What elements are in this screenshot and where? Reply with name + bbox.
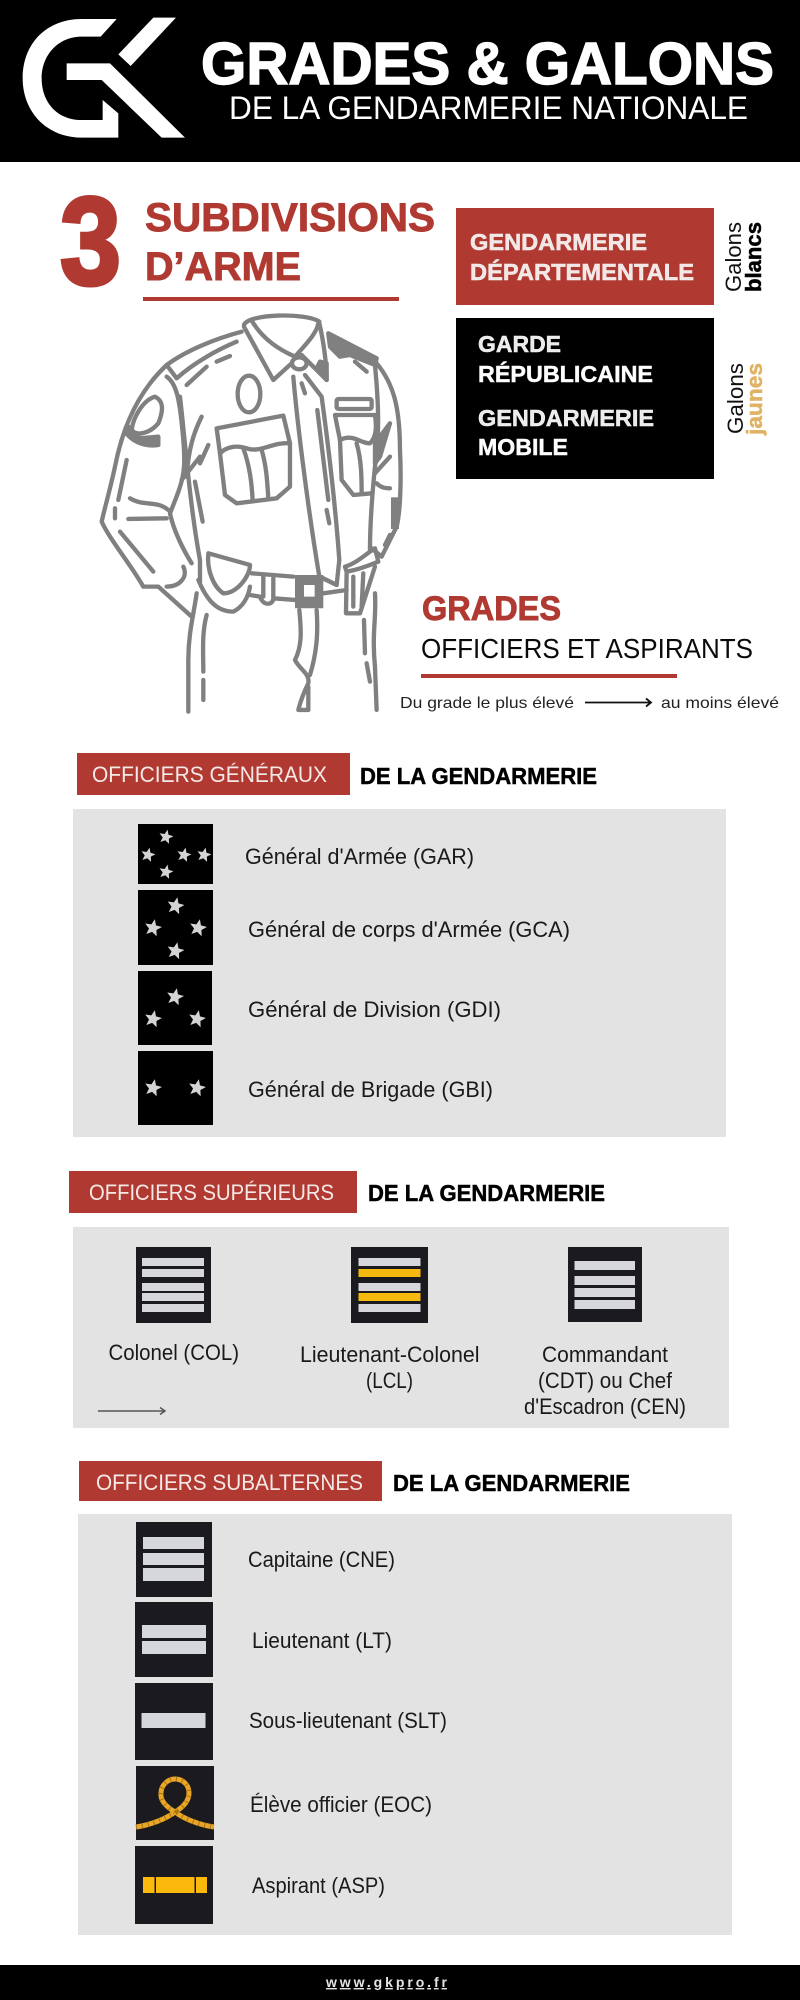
icon: GK logo — [23, 18, 185, 138]
note: sens de lecture des grades: Du grade le plus élevé — [400, 695, 574, 712]
arrow: sens de lecture — [98, 1408, 165, 1414]
note: sens de lecture des grades — [400, 695, 779, 712]
section heading: officiers supérieurs — [69, 1171, 605, 1213]
panel: garde républicaine et gendarmerie mobile: GARDE — [478, 331, 561, 357]
badge: aspirant — [135, 1846, 213, 1924]
heading: 3 subdivisions d'arme — [60, 173, 435, 311]
panel: gendarmerie départementale: GENDARMERIE — [470, 229, 647, 255]
panel: garde républicaine et gendarmerie mobile: MOBILE — [478, 434, 568, 460]
heading: 3 subdivisions d'arme: 3 — [60, 173, 121, 311]
label: général de brigade: Général de Brigade (GBI) — [248, 1077, 493, 1102]
label: commandant ou chef d'escadron — [524, 1342, 686, 1419]
subtitle: DE LA GENDARMERIE NATIONALE — [229, 90, 748, 126]
label: commandant ou chef d'escadron: (CDT) ou Chef — [538, 1368, 673, 1393]
section heading: officiers généraux: DE LA GENDARMERIE — [360, 763, 597, 789]
header banner — [0, 0, 800, 162]
heading: grades officiers et aspirants: OFFICIERS ET ASPIRANTS — [421, 633, 753, 664]
badge: général de division, trois étoiles — [138, 971, 212, 1045]
illustration: uniform shirt — [102, 316, 401, 712]
label: lieutenant-colonel: (LCL) — [366, 1368, 413, 1393]
heading: 3 subdivisions d'arme: SUBDIVISIONS — [145, 196, 435, 240]
label: lieutenant-colonel — [300, 1342, 480, 1393]
label: galons jaunes: Galons — [723, 363, 748, 434]
section heading: officiers subalternes — [79, 1461, 630, 1501]
panel: officiers généraux — [73, 809, 726, 1137]
note: sens de lecture des grades: au moins élevé — [661, 695, 779, 712]
panel: officiers subalternes — [78, 1514, 732, 1935]
panel: garde républicaine et gendarmerie mobile: GENDARMERIE — [478, 405, 654, 431]
badge: sous-lieutenant — [135, 1683, 213, 1760]
footer — [0, 1965, 800, 2000]
label: lieutenant-colonel: Lieutenant-Colonel — [300, 1342, 480, 1367]
label: général de corps d'armée: Général de corps d'Armée (GCA) — [248, 917, 570, 942]
label: commandant ou chef d'escadron: d'Escadron (CEN) — [524, 1394, 686, 1419]
section heading: officiers généraux: OFFICIERS GÉNÉRAUX — [92, 762, 327, 787]
section heading: officiers subalternes: DE LA GENDARMERIE — [393, 1470, 630, 1496]
label: galons jaunes — [723, 363, 767, 436]
heading: 3 subdivisions d'arme: D’ARME — [145, 245, 301, 289]
section heading: officiers généraux — [77, 753, 597, 795]
badge: capitaine — [136, 1522, 212, 1597]
label: colonel: Colonel (COL) — [108, 1340, 239, 1365]
label: lieutenant: Lieutenant (LT) — [252, 1628, 392, 1653]
label: sous-lieutenant: Sous-lieutenant (SLT) — [249, 1708, 447, 1733]
label: commandant ou chef d'escadron: Commandant — [542, 1342, 668, 1367]
label: aspirant: Aspirant (ASP) — [252, 1873, 385, 1898]
section heading: officiers supérieurs: DE LA GENDARMERIE — [368, 1180, 605, 1206]
section heading: officiers supérieurs: OFFICIERS SUPÉRIEURS — [89, 1180, 334, 1205]
label: galons blancs: blancs — [741, 222, 766, 292]
label: général de division: Général de Division (GDI) — [248, 997, 501, 1022]
badge: colonel — [136, 1247, 211, 1323]
footer: www.gkpro.fr — [325, 1974, 448, 1990]
badge: général de corps d'armée, quatre étoiles — [138, 890, 213, 965]
label: galons jaunes: jaunes — [742, 363, 767, 436]
badge: général de brigade, deux étoiles — [138, 1051, 213, 1125]
label: galons blancs: Galons — [721, 222, 746, 292]
heading: grades officiers et aspirants: GRADES — [422, 590, 561, 628]
badge: général d'armée, cinq étoiles — [138, 824, 213, 884]
label: général d'armée: Général d'Armée (GAR) — [245, 844, 474, 869]
panel: garde républicaine et gendarmerie mobile — [456, 318, 714, 479]
panel: officiers supérieurs — [73, 1227, 729, 1428]
badge: élève officier, cordon — [136, 1766, 214, 1840]
panel: gendarmerie départementale — [456, 208, 714, 305]
section heading: officiers subalternes: OFFICIERS SUBALTERNES — [96, 1470, 363, 1495]
title: GRADES & GALONS — [201, 31, 774, 97]
badge: lieutenant-colonel — [351, 1247, 428, 1323]
label: élève officier: Élève officier (EOC) — [250, 1792, 432, 1817]
badge: lieutenant — [135, 1602, 213, 1677]
panel: garde républicaine et gendarmerie mobile: RÉPUBLICAINE — [478, 360, 653, 387]
badge: commandant — [568, 1247, 642, 1322]
label: capitaine: Capitaine (CNE) — [248, 1547, 395, 1572]
label: galons blancs — [721, 222, 766, 292]
heading: grades officiers et aspirants — [421, 590, 753, 678]
panel: gendarmerie départementale: DÉPARTEMENTALE — [470, 258, 694, 285]
